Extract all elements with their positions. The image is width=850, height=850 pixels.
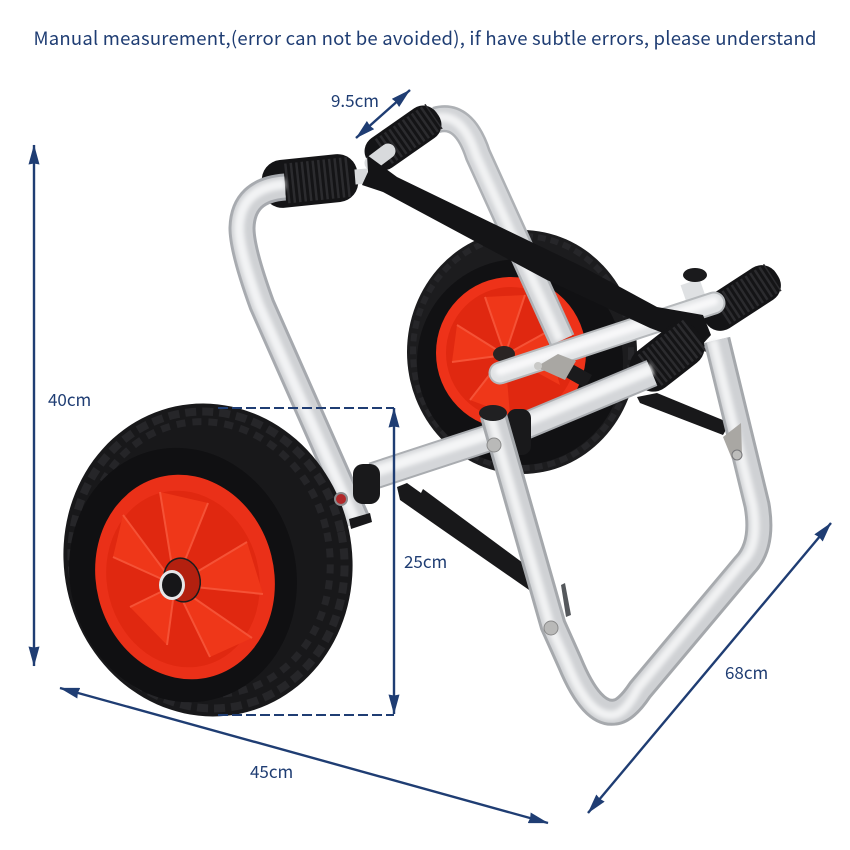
- arrow: 40cm: [33, 145, 35, 666]
- label: 9.5cm: 9.5cm: [331, 87, 379, 112]
- label: 40cm: 40cm: [48, 386, 91, 411]
- tube stubs between grips: [355, 151, 388, 177]
- upper cross tube: [500, 301, 714, 373]
- front wheel: [35, 376, 381, 744]
- foam grip: rear left: [358, 99, 448, 177]
- left tube end cap: [349, 513, 372, 529]
- tube joints: [353, 409, 531, 504]
- right U frame: [490, 340, 759, 715]
- strap: lower right: [637, 393, 730, 435]
- red bolt on left tube: [335, 493, 347, 505]
- right bracket: [723, 423, 742, 460]
- arrow: 45cm: [60, 688, 548, 823]
- foam grip: front left: [260, 152, 360, 210]
- front left tube frame: [239, 184, 358, 522]
- foam grip: front right: [621, 314, 713, 400]
- arrow: 68cm: [588, 523, 831, 813]
- upper strap: [362, 155, 711, 347]
- rear hoop frame: [436, 117, 562, 340]
- arrow: 9.5cm: [356, 90, 410, 138]
- label: 25cm: 25cm: [404, 548, 447, 573]
- strap under axle: [397, 483, 532, 592]
- dashed guides for wheel height: [218, 408, 394, 715]
- upright cap and bolts: [479, 405, 571, 635]
- label: 45cm: 45cm: [250, 758, 293, 783]
- rear upright knob: [683, 268, 707, 302]
- title: Manual measurement,(error can not be avoided), if have subtle errors, please understand: [34, 25, 816, 51]
- foam grip: rear right: [695, 259, 787, 337]
- arrow: 25cm: [393, 408, 395, 714]
- short strap with bracket: [534, 354, 592, 388]
- label: 68cm: 68cm: [725, 659, 768, 684]
- far wheel: [407, 230, 637, 474]
- lower centre axle tube: [373, 369, 652, 476]
